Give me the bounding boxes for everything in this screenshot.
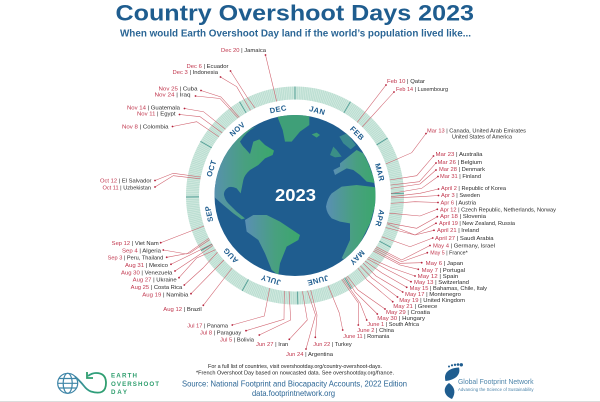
callout: Dec 6 Ecuador [186,64,255,108]
callout: Oct 12 El Salvador: Oct 12 | El Salvador [100,178,152,184]
callout: Nov 11 Egypt: Nov 11 | Egypt [137,112,176,118]
callout: May 19 United Kingdom [360,266,465,304]
callout: April 27 Saudi Arabia: April 27 | Saudi Arabia [435,236,494,242]
callout: May 19 United Kingdom: May 19 | United Kingdom [399,298,465,304]
callout: Nov 14 Guatemala [127,106,226,129]
callout: April 19 New Zealand, Russia [387,221,516,235]
callout: May 6 Japan [374,250,463,267]
source line: Source: National Footprint and Biocapacity Accounts, 2022 Edition [182,378,407,388]
callout: Feb 10 Qatar [357,79,425,122]
callout: Sep 12 Viet Nam [112,226,204,247]
callout: Jun 24 Argentina: Jun 24 | Argentina [286,352,334,358]
callout: Nov 24 Iraq: Nov 24 | Iraq [154,92,190,98]
callout: May 5 France [375,248,468,262]
callout: Aug 27 Ukraine [133,250,216,284]
callout: Mar 23 Australia [390,152,483,180]
callout: May 29 Croatia: May 29 | Croatia [386,310,431,316]
callout: Sep 12 Viet Nam: Sep 12 | Viet Nam [112,241,159,247]
callout: Apr 12 Czech Republic, Netherlands, Norway: Apr 12 | Czech Republic, Netherlands, Norway [440,208,556,214]
callout: Mar 28 Denmark [391,167,485,188]
callout: Jun 27 Iran [256,291,307,348]
logo: Global Footprint Network: Global Footprint Network [458,377,534,386]
callout: June 11 Romania: June 11 | Romania [343,334,390,340]
callout: April 2 Republic of Korea [391,186,507,197]
callout: Dec 6 Ecuador: Dec 6 | Ecuador [186,64,229,70]
callout: June 1 South Africa [343,278,420,328]
callout: Mar 31 Finland: Mar 31 | Finland [440,174,481,180]
callout: Nov 8 Colombia [122,122,219,137]
callout: April 19 New Zealand, Russia: April 19 | New Zealand, Russia [439,221,516,227]
callout: May 4 Germany, Israel [376,244,495,260]
callout: May 7 Portugal [373,251,465,274]
callout: May 7 Portugal: May 7 | Portugal [422,268,465,274]
callout: Sep 4 Algeria: Sep 4 | Algeria [122,248,162,254]
callout: Aug 27 Ukraine: Aug 27 | Ukraine [133,278,177,284]
callout: April 3 Sweden: Apr 3 | Sweden [441,193,480,199]
callout: Apr 6 Austria: Apr 6 | Austria [440,200,477,206]
logo: Global Footprint Network [445,363,534,399]
callout: Aug 30 Venezuela [121,245,213,276]
callout: June 2 China: June 2 | China [357,328,395,334]
callout: May 29 Croatia [347,276,431,316]
month labels [203,103,386,287]
callout: Mar 26 Belgium [390,160,482,185]
month labels: FEB [348,124,366,142]
callout: Aug 25 Costa Rica [131,252,218,291]
month labels: APR [373,209,386,228]
callout: Jul 8 Paraguay: Jul 8 | Paraguay [200,330,241,336]
logo: Global Footprint Network: Advancing the Science of Sustainability [458,387,534,392]
callout: May 17 Montenegro [363,263,461,298]
callout: May 21 Greece [358,268,437,310]
callout: Aug 12 Brazil: Aug 12 | Brazil [163,307,202,313]
callout: May 6 Japan: May 6 | Japan [426,261,463,267]
callout: May 15 Bahamas, Chile, Italy [365,261,487,292]
callout: Feb 14 Luxembourg [362,87,448,127]
callout: Aug 30 Venezuela: Aug 30 | Venezuela [121,270,173,276]
title: Country Overshoot Days 2023 [116,0,474,26]
callout: Dec 3 Indonesia [172,70,250,110]
callout: Mar 26 Belgium: Mar 26 | Belgium [438,160,482,166]
callout: Aug 19 Namibia: Aug 19 | Namibia [142,292,189,298]
callout: Apr 18 Slovenia: Apr 18 | Slovenia [440,214,487,220]
callout: Mar 13 Canada, UAE, USA: United States of America [452,134,513,140]
callout: May 30 Hungary: May 30 | Hungary [377,316,425,322]
callout: Sep 3 Peru, Thailand: Sep 3 | Peru, Thailand [108,256,163,262]
callout: Jun 22 Turkey [311,290,352,348]
month labels: JAN [308,104,326,117]
footnote: full list: For a full list of countries, visit overshootday.org/country-overshoot-days. [208,364,382,370]
callout: May 12 Spain: May 12 | Spain [418,274,458,280]
globe year label: 2023 [275,185,316,205]
callout: May 17 Montenegro: May 17 | Montenegro [405,292,461,298]
month labels: MAY [348,248,366,267]
callout: Apr 6 Austria [391,200,477,206]
month labels: OCT [205,159,218,178]
source url: data.footprintnetwork.org [252,388,335,398]
callout: Dec 3 Indonesia: Dec 3 | Indonesia [172,70,219,76]
callout: April 2 Republic of Korea: April 2 | Republic of Korea [441,186,507,192]
globe [210,113,377,276]
callout: Jul 5 Bolivia [220,291,291,344]
month labels: JULY [260,273,282,287]
callout: May 4 Germany, Israel: May 4 | Germany, Israel [433,244,495,250]
callout: Apr 18 Slovenia [387,214,487,228]
callout: Aug 19 Namibia [142,260,224,298]
month labels: JUNE [306,273,329,287]
callout: Jul 8 Paraguay [200,291,284,336]
callout: Nov 25 Cuba [158,86,239,117]
callout: Apr 12 Czech Republic, Netherlands, Norway [389,208,556,216]
callout: May 15 Bahamas, Chile, Italy: May 15 | Bahamas, Chile, Italy [410,286,487,292]
callout: Mar 13 Canada, UAE, USA: Mar 13 | Canada, United Arab Emirates [427,128,526,134]
callout: Aug 31 Mexico: Aug 31 | Mexico [125,263,168,269]
callout: April 21 Ireland [386,228,479,235]
callout: Jul 17 Panama: Jul 17 | Panama [187,324,229,330]
month labels: SEP [203,205,215,223]
callout: May 30 Hungary [346,277,425,322]
callout: Sep 4 Algeria [122,238,209,254]
callout: May 13 Switzerland [367,259,469,286]
calendar ring of daily ticks [186,86,404,304]
callout: Jul 5 Bolivia: Jul 5 | Bolivia [220,338,255,344]
callout: Feb 14 Luxembourg: Feb 14 | Luxembourg [396,87,448,93]
callout: Jun 24 Argentina [286,291,334,358]
callout: Aug 31 Mexico [125,244,212,269]
callout: April 3 Sweden [391,193,480,199]
callout: Dec 20 Jamaica: Dec 20 | Jamaica [221,48,267,54]
callout: Nov 8 Colombia: Nov 8 | Colombia [122,124,169,130]
callout: Nov 24 Iraq [154,92,238,118]
callout: Mar 13 Canada, UAE, USA [386,128,526,164]
callout: Oct 11 Uzbekistan: Oct 11 | Uzbekistan [102,186,151,192]
callout: Nov 25 Cuba: Nov 25 | Cuba [158,86,198,92]
callout: May 21 Greece: May 21 | Greece [393,304,437,310]
month labels: DEC [269,103,288,115]
callout: May 13 Switzerland: May 13 | Switzerland [414,280,469,286]
callout: Mar 23 Australia: Mar 23 | Australia [436,152,483,158]
subtitle: When would Earth Overshoot Day land if the world’s population lived like... [120,28,471,40]
callout: Feb 10 Qatar: Feb 10 | Qatar [387,79,425,85]
footnote: France: *French Overshoot Day based on nowcasted data. See overshootday.org/france. [196,370,394,376]
callout: April 27 Saudi Arabia [382,236,494,247]
callout: June 11 Romania [328,286,390,340]
callout: Oct 12 El Salvador [100,173,201,184]
logo: Earth Overshoot Day: OVERSHOOT [111,381,159,388]
callout: Dec 20 Jamaica [221,48,277,102]
logo: Earth Overshoot Day [58,372,159,396]
callout: Jun 27 Iran: Jun 27 | Iran [256,342,288,348]
callout: Aug 25 Costa Rica: Aug 25 | Costa Rica [131,285,183,291]
logo: Earth Overshoot Day: DAY [111,389,128,396]
callout: Jul 17 Panama [187,288,270,330]
callout: Mar 31 Finland [391,174,481,194]
callout: Oct 11 Uzbekistan [102,176,200,192]
callout: May 12 Spain [368,257,458,280]
month labels: AUG [221,246,240,265]
callout: April 21 Ireland: April 21 | Ireland [437,228,479,234]
callout: Sep 3 Peru, Thailand [108,240,210,262]
callout: Aug 12 Brazil [163,268,232,313]
logo: Earth Overshoot Day: EARTH [111,372,138,379]
callout: Mar 28 Denmark: Mar 28 | Denmark [439,167,485,173]
callout: Jun 22 Turkey: Jun 22 | Turkey [313,342,352,348]
callout: May 5 France: May 5 | France* [430,250,468,256]
month labels: MAR [373,162,386,183]
callout: Nov 14 Guatemala: Nov 14 | Guatemala [127,106,181,112]
callout: June 2 China [342,279,395,334]
callout: Nov 11 Egypt [137,112,222,133]
month labels: NOV [228,120,247,138]
callout: June 1 South Africa: June 1 | South Africa [367,322,420,328]
